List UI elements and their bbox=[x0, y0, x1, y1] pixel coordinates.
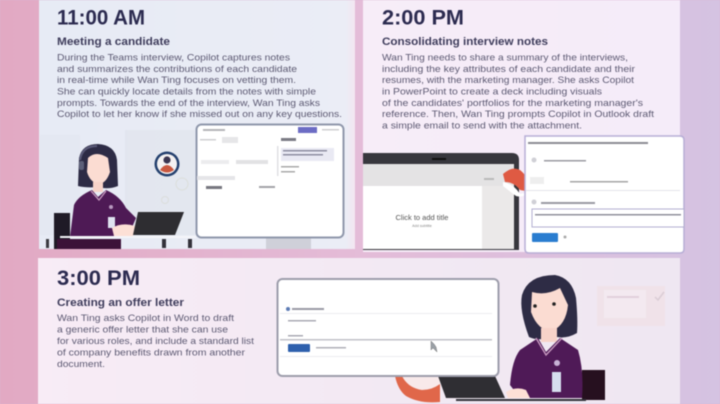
grey floor block bbox=[266, 236, 311, 249]
body text: meeting bbox=[57, 52, 342, 119]
body text: offer letter bbox=[57, 312, 254, 369]
body text: meeting: She can quickly locate details from the notes with simple bbox=[57, 86, 316, 96]
window: Teams Copilot screenshot bbox=[196, 124, 344, 238]
decorative chat icons bbox=[162, 178, 188, 204]
faded background card with check mark bbox=[597, 286, 665, 326]
illustration: woman with headset at laptop bbox=[46, 144, 196, 249]
icon: red ribbon bbox=[395, 376, 440, 402]
body text: consolidating: reference. Then, Wan Ting prompts Copilot in Outlook draft bbox=[382, 108, 654, 119]
window: Outlook Copilot draft bbox=[525, 136, 684, 253]
body text: consolidating: a simple email to send with the attachment. bbox=[382, 120, 582, 130]
subheading: Creating an offer letter: Creating an offer letter bbox=[57, 297, 185, 309]
time: 3:00 PM: 3:00 PM bbox=[57, 267, 140, 290]
body text: consolidating: in PowerPoint to create a deck including visuals bbox=[382, 86, 602, 96]
subheading: Consolidating interview notes: Consolidating interview notes bbox=[382, 36, 548, 48]
faded office backdrop bbox=[40, 130, 195, 235]
slide placeholder: Click to add title bbox=[396, 213, 448, 222]
subheading: Meeting a candidate: Meeting a candidate bbox=[57, 36, 170, 48]
body text: consolidating: Wan Ting needs to share a summary of the interviews, bbox=[382, 52, 628, 62]
laptop: PowerPoint screen bbox=[363, 153, 519, 250]
panel: 3:00 PM creating an offer letter bbox=[38, 258, 680, 404]
icon: mouse cursor bbox=[431, 341, 437, 352]
panel: 11:00 AM meeting a candidate bbox=[39, 0, 355, 249]
laptop: Word bbox=[438, 376, 505, 398]
body text: consolidating: including the key attributes of each candidate and their bbox=[382, 63, 635, 74]
window: Word Copilot prompt bbox=[278, 279, 498, 376]
illustration: woman at desk bbox=[456, 275, 605, 401]
time: 11:00 AM: 11:00 AM bbox=[57, 6, 145, 30]
icon: red ribbon bbox=[503, 169, 531, 196]
body text: consolidating: of the candidates' portfolios for the marketing manager's bbox=[382, 97, 643, 108]
icon: candidate avatar bbox=[154, 152, 180, 176]
body text: offer letter: Wan Ting asks Copilot in Word to draft bbox=[57, 312, 234, 323]
body text: meeting: prompts. Towards the end of the interview, Wan Ting asks bbox=[57, 97, 320, 108]
body text: meeting: Copilot to let her know if she missed out on any key questions. bbox=[57, 108, 342, 119]
body text: meeting: During the Teams interview, Copilot captures notes bbox=[57, 52, 290, 62]
body text: meeting: and summarizes the contributions of each candidate bbox=[57, 63, 297, 74]
body text: consolidating: resumes, with the marketing manager. She asks Copilot bbox=[382, 74, 634, 85]
panel: 2:00 PM consolidating interview notes bbox=[363, 0, 684, 253]
body text: offer letter: for various roles, and include a standard list bbox=[57, 335, 254, 346]
body text: offer letter: a generic offer letter that she can use bbox=[57, 324, 228, 334]
body text: offer letter: document. bbox=[57, 358, 105, 369]
body text: consolidating bbox=[382, 52, 654, 130]
body text: meeting: in real-time while Wan Ting focuses on vetting them. bbox=[57, 74, 296, 85]
time: 2:00 PM: 2:00 PM bbox=[382, 6, 464, 30]
body text: offer letter: of company benefits drawn from another bbox=[57, 346, 245, 358]
laptop: PowerPoint screen: Add subtitle bbox=[412, 224, 432, 228]
